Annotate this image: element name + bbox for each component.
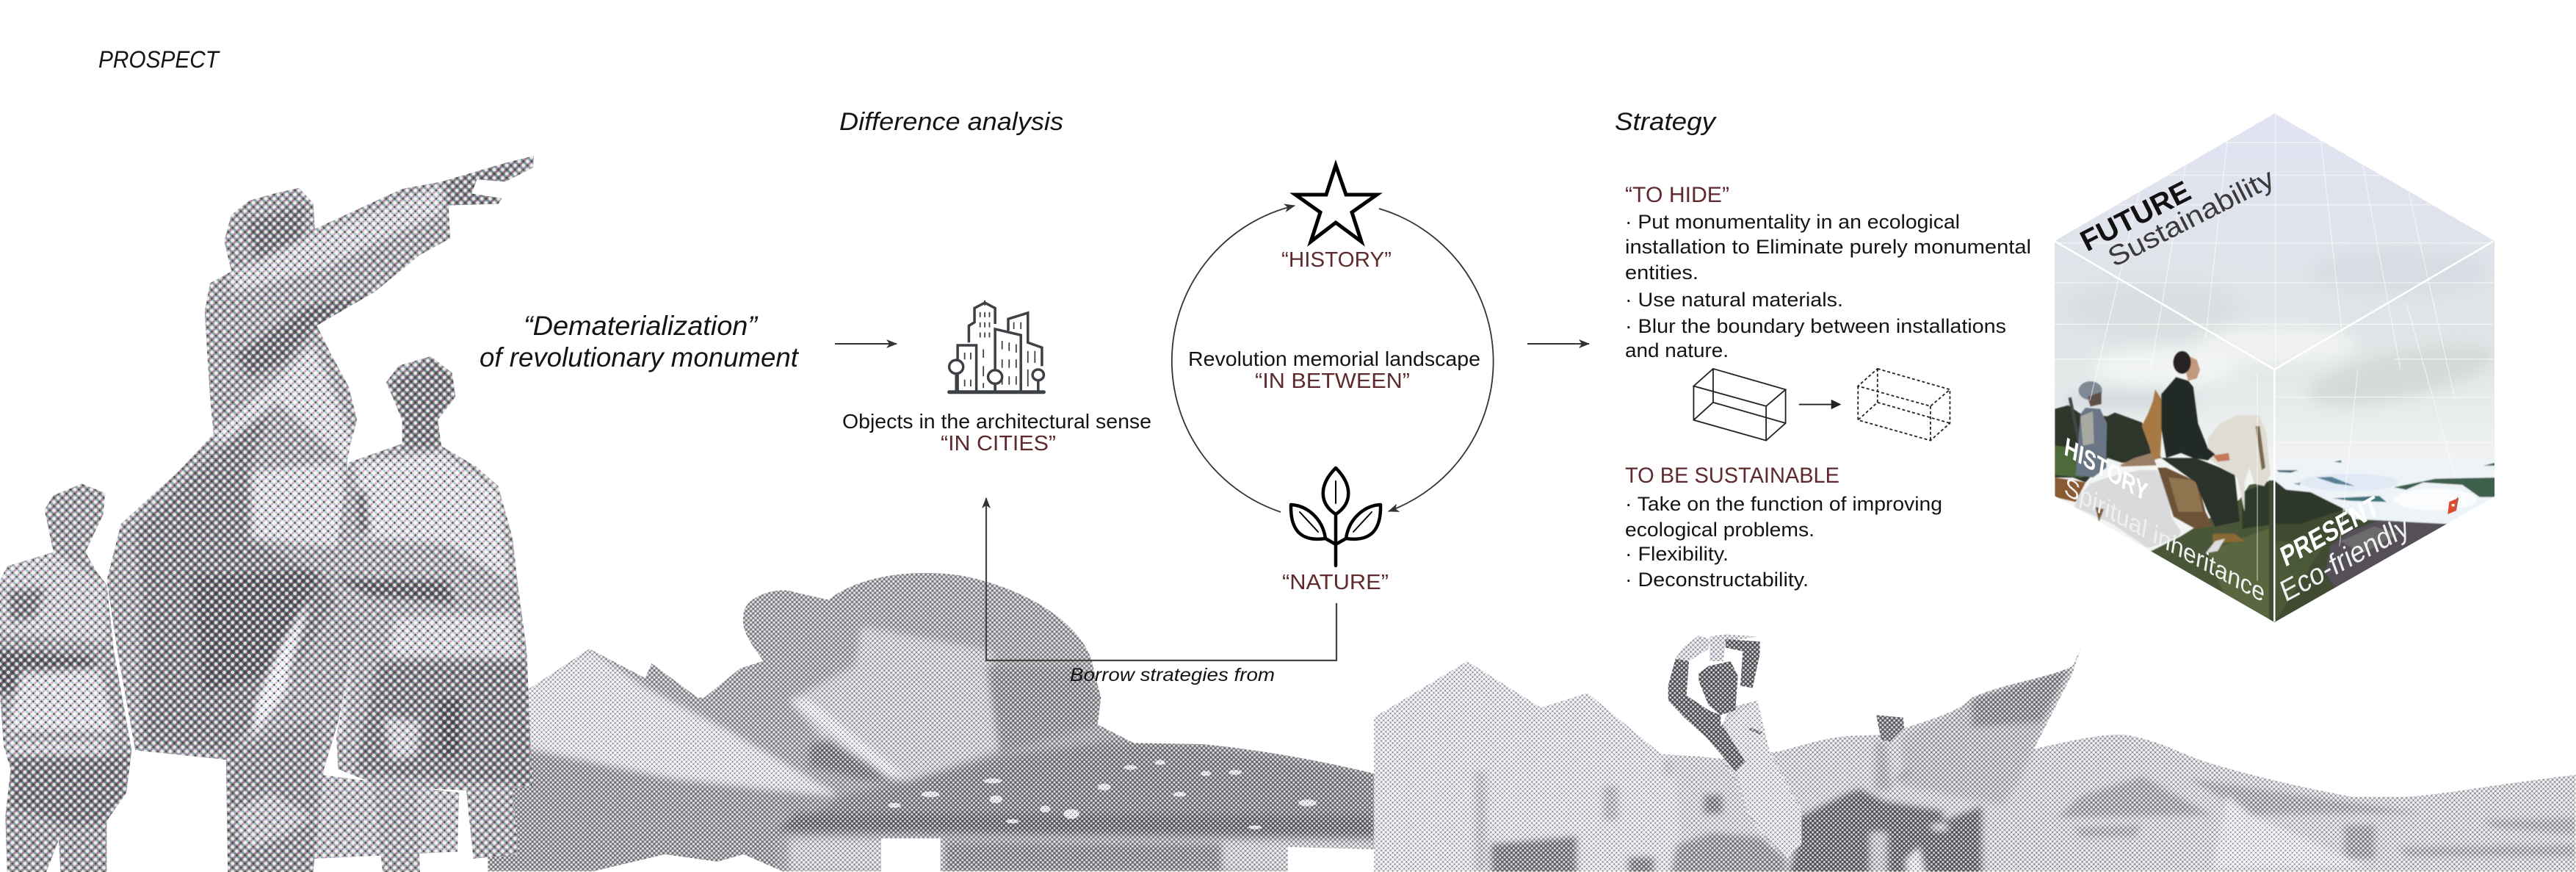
image: hexagonal cube with painting bbox=[2055, 113, 2500, 627]
cube label: present eco-friendly: Eco-friendly bbox=[2276, 510, 2413, 608]
painting: left face bbox=[2055, 351, 2275, 624]
text block: to be sustainable: TO BE SUSTAINABLE bbox=[1625, 464, 1839, 488]
text block: to hide: installation to Eliminate purely monumental bbox=[1625, 236, 2031, 258]
quote: dematerialization of revolutionary monument bbox=[480, 311, 800, 372]
heading: Strategy: Strategy bbox=[1615, 108, 1717, 136]
text block: to hide: and nature. bbox=[1625, 339, 1729, 361]
flag bbox=[2447, 497, 2459, 514]
icon: star bbox=[1295, 165, 1377, 242]
icon: city buildings bbox=[949, 300, 1043, 392]
label: objects in cities: Objects in the architectural sense bbox=[842, 410, 1151, 433]
icon: solid box to dashed box bbox=[1693, 369, 1950, 441]
title: PROSPECT: PROSPECT bbox=[98, 46, 220, 73]
diagram: cycle arcs bbox=[1172, 206, 1494, 512]
label: nature: “NATURE” bbox=[1282, 571, 1389, 594]
label: revolution memorial landscape in between bbox=[1188, 347, 1480, 393]
text block: to hide: · Blur the boundary between installations bbox=[1625, 315, 2006, 337]
text block: to be sustainable bbox=[1625, 464, 1942, 591]
cube label: history spiritual inheritance: HISTORY bbox=[2063, 432, 2149, 508]
figure: right soldier bbox=[331, 356, 532, 872]
text block: to be sustainable: · Flexibility. bbox=[1625, 543, 1729, 565]
text block: to be sustainable: · Deconstructability. bbox=[1625, 569, 1809, 591]
text block: to hide: “TO HIDE” bbox=[1625, 183, 1729, 207]
painting: right face bbox=[2269, 461, 2497, 627]
cube label: history spiritual inheritance: Spiritual inheritance bbox=[2063, 472, 2267, 608]
image: halftone monument of three revolutionary figures bbox=[0, 146, 541, 872]
icon: three-leaf plant bbox=[1291, 468, 1381, 566]
label: objects in cities bbox=[842, 410, 1151, 455]
cube label: future sustainability: FUTURE bbox=[2075, 175, 2196, 258]
perspective grid and cube edges bbox=[2055, 114, 2494, 621]
label: history: “HISTORY” bbox=[1281, 248, 1392, 272]
arrow: nature back to cities bbox=[986, 498, 1336, 660]
text block: to hide: · Put monumentality in an ecological bbox=[1625, 211, 1960, 233]
cube label: future sustainability: Sustainability bbox=[2103, 163, 2279, 273]
quote: dematerialization of revolutionary monument: of revolutionary monument bbox=[480, 342, 800, 372]
figure: left soldier bbox=[0, 483, 132, 872]
label: revolution memorial landscape in between: “IN BETWEEN” bbox=[1255, 370, 1410, 393]
text block: to hide: entities. bbox=[1625, 262, 1698, 284]
text block: to be sustainable: · Take on the function of improving bbox=[1625, 493, 1942, 515]
heading: Difference analysis: Difference analysis bbox=[839, 108, 1063, 136]
arrow: quote to cities bbox=[835, 343, 897, 345]
label: revolution memorial landscape in between: Revolution memorial landscape bbox=[1188, 347, 1480, 370]
label: objects in cities: “IN CITIES” bbox=[941, 432, 1056, 455]
figure: central leader with pointing arm bbox=[100, 146, 541, 872]
image: halftone houses and hills bbox=[1358, 644, 2576, 872]
text block: to hide bbox=[1625, 183, 2031, 361]
arrow: cycle to strategy bbox=[1527, 343, 1589, 345]
text block: to be sustainable: ecological problems. bbox=[1625, 519, 1815, 541]
quote: dematerialization of revolutionary monument: “Dematerialization” bbox=[524, 311, 759, 341]
cube label: present eco-friendly: PRESENT bbox=[2276, 491, 2384, 573]
text block: to hide: · Use natural materials. bbox=[1625, 289, 1843, 311]
image: halftone sculpture with raised arms bbox=[1665, 632, 1909, 865]
label: borrow strategies from: Borrow strategies from bbox=[1070, 665, 1275, 685]
image: halftone building and dome collage bbox=[474, 553, 1393, 872]
